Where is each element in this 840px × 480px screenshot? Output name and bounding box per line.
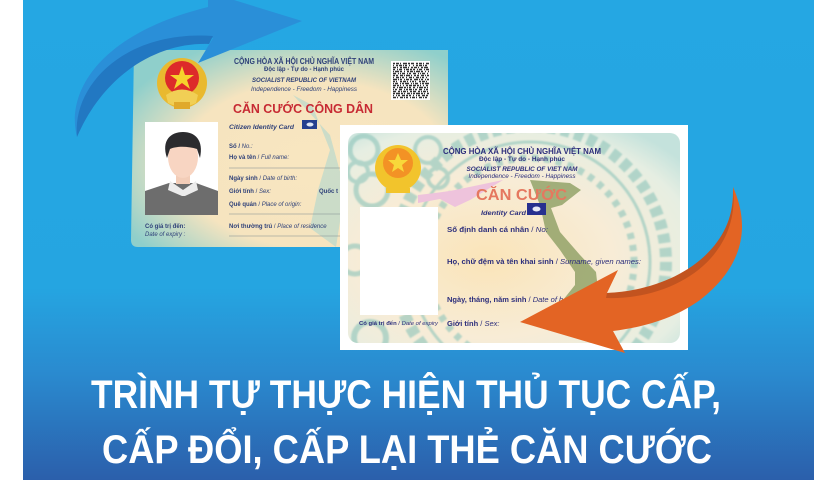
card header text: Independence - Freedom - Happiness <box>468 173 576 180</box>
card: new identity card <box>340 125 688 350</box>
icon: QR code <box>391 61 430 100</box>
card fields: Giới tính / Sex: <box>447 319 499 328</box>
card header text: SOCIALIST REPUBLIC OF VIETNAM <box>252 77 357 84</box>
card title: CĂN CƯỚC CÔNG DÂN <box>233 101 373 116</box>
card fields: Số định danh cá nhân / No: <box>447 226 548 234</box>
portrait photo <box>145 122 218 215</box>
card subtitle and chip <box>229 120 317 131</box>
card header text: SOCIALIST REPUBLIC OF VIET NAM <box>466 166 578 173</box>
card fields: Họ và tên / Full name: <box>229 155 289 161</box>
arrow: orange curved arrow <box>520 187 742 353</box>
card fields: Giới tính / Sex: <box>229 189 271 195</box>
pink ribbon <box>418 180 503 207</box>
icon: national emblem <box>157 58 207 109</box>
card header text: CỘNG HÒA XÃ HỘI CHỦ NGHĨA VIỆT NAM <box>443 147 601 156</box>
card: citizen identity card <box>131 50 448 247</box>
icon: emblem <box>375 145 421 193</box>
arrow: blue curved arrow <box>75 0 302 137</box>
card fields: Có giá trị đến: <box>145 223 185 230</box>
card fields: Date of expiry : <box>145 232 186 238</box>
card subtitle and chip <box>481 203 546 217</box>
card header text <box>234 57 374 93</box>
card fields: Họ, chữ đệm và tên khai sinh / Surname, given names: <box>447 259 641 266</box>
card fields: Nơi thường trú / Place of residence <box>229 224 327 230</box>
map of Vietnam <box>530 180 598 300</box>
decorative bronze drum pattern <box>348 133 673 343</box>
card header text: Độc lập - Tự do - Hạnh phúc <box>264 67 345 73</box>
card header text: Độc lập - Tự do - Hạnh phúc <box>479 157 566 163</box>
card fields: Số / No.: <box>229 143 253 150</box>
card fields <box>359 226 641 328</box>
card header text: Independence - Freedom - Happiness <box>251 86 358 93</box>
card fields <box>145 143 338 238</box>
card title: CĂN CƯỚC <box>476 185 567 204</box>
card header text <box>443 147 601 180</box>
title: CẤP ĐỔI, CẤP LẠI THẺ CĂN CƯỚC <box>102 425 712 472</box>
blank photo <box>360 207 438 315</box>
title: TRÌNH TỰ THỰC HIỆN THỦ TỤC CẤP, <box>91 371 721 417</box>
card subtitle and chip: Citizen Identity Card <box>229 124 295 131</box>
card subtitle and chip: Identity Card <box>481 210 527 217</box>
card fields: Ngày sinh / Date of birth: <box>229 176 297 182</box>
card fields: Ngày, tháng, năm sinh / Date of b <box>447 295 563 304</box>
card fields: Có giá trị đến / Date of expiry <box>359 320 439 327</box>
title <box>91 371 721 472</box>
card header text: CỘNG HÒA XÃ HỘI CHỦ NGHĨA VIỆT NAM <box>234 57 374 66</box>
card fields: Quê quán / Place of origin: <box>229 202 302 208</box>
card fields: Quốc t <box>319 188 338 195</box>
